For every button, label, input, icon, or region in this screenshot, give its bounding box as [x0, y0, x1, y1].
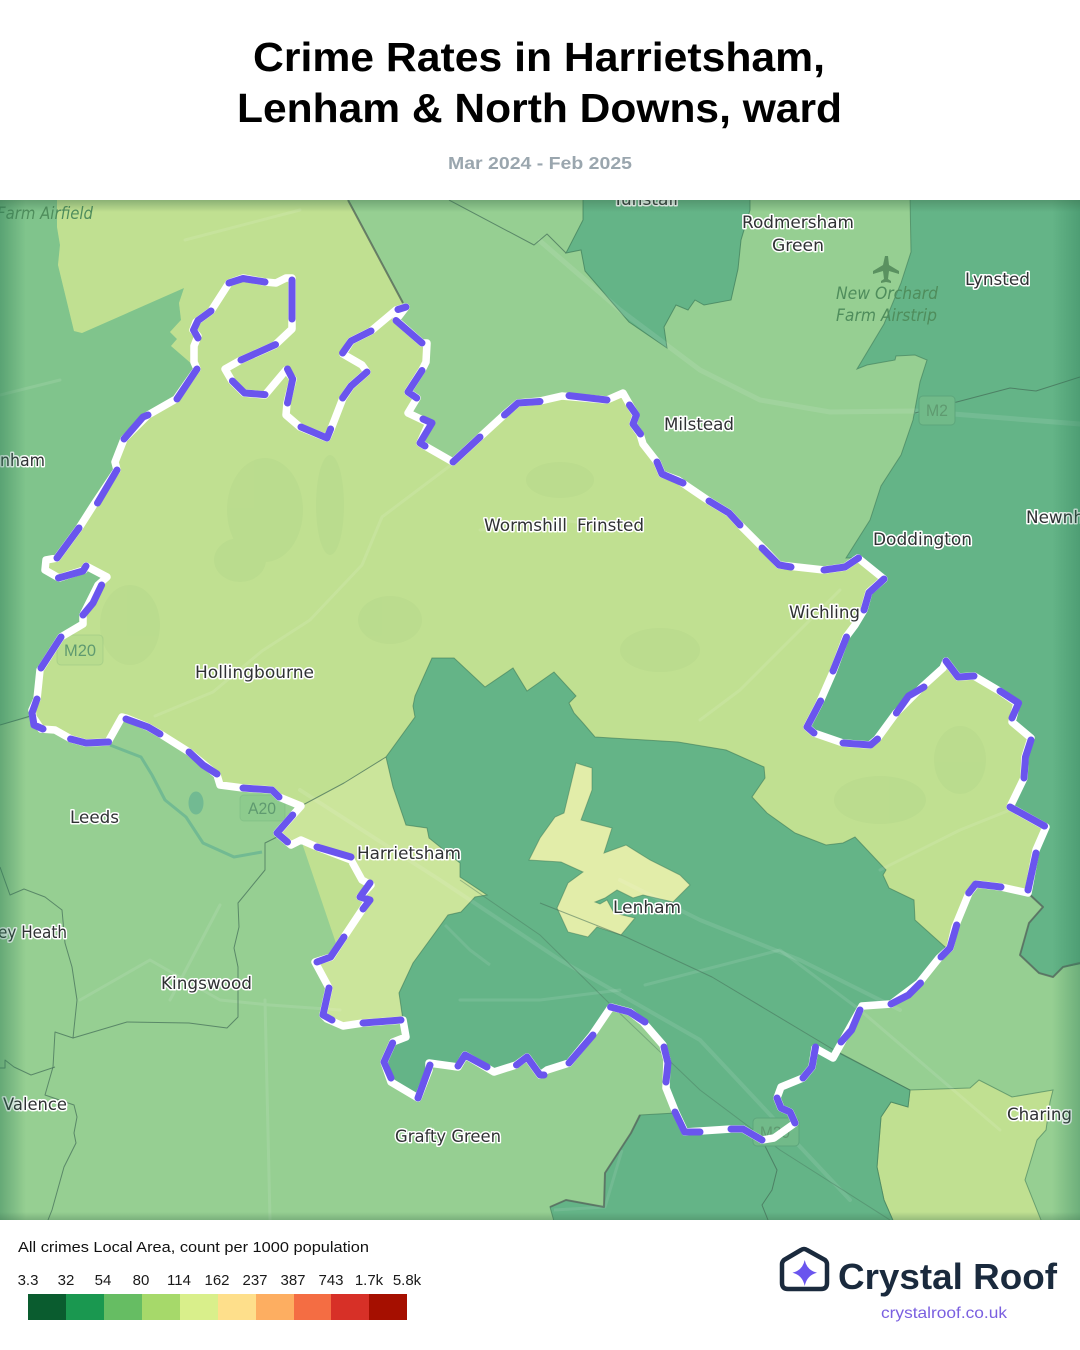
legend values [18, 1272, 422, 1289]
place labels [0, 190, 1080, 1146]
airfield labels: New Orchard [836, 284, 938, 303]
ward boundary purple dashes [32, 278, 1044, 1140]
icon: airplane [873, 256, 899, 283]
date range subtitle: Mar 2024 - Feb 2025 [448, 153, 632, 173]
place labels: Lynsted [965, 270, 1030, 289]
map [0, 190, 1080, 1225]
road shields: M20 [64, 641, 96, 660]
region: west mid green [0, 200, 197, 725]
website: crystalroof.co.uk [881, 1305, 1008, 1322]
legend values: 1.7k [355, 1272, 384, 1289]
legend values: 162 [204, 1272, 230, 1289]
legend values: 743 [318, 1272, 344, 1289]
place labels: Grafty Green [395, 1127, 501, 1146]
road shields [57, 396, 955, 1146]
icon: house with star [782, 1249, 827, 1289]
legend values: 237 [242, 1272, 268, 1289]
place labels: Valence [3, 1095, 67, 1114]
place labels: nham [0, 451, 45, 470]
place labels: Lenham [613, 898, 681, 917]
river [110, 745, 622, 1210]
airfield labels: Farm Airstrip [836, 306, 937, 325]
legend values: 3.3 [18, 1272, 38, 1289]
place labels: Charing [1007, 1105, 1072, 1124]
region: Harrietsham yellow green [277, 757, 487, 1026]
road shields: A20 [248, 799, 276, 818]
place labels: ey Heath [0, 923, 67, 942]
title: Lenham & North Downs, ward [237, 85, 842, 131]
legend values: 5.8k [393, 1272, 422, 1289]
legend values: 54 [95, 1272, 111, 1289]
place labels: Rodmersham [742, 213, 854, 232]
place labels: Doddington [873, 530, 972, 549]
legend values: 32 [58, 1272, 74, 1289]
road shields: M20 [760, 1123, 790, 1142]
place labels: Hollingbourne [195, 663, 314, 682]
ward boundary white line [32, 278, 1046, 1140]
region: Lenham pale yellow [529, 763, 690, 937]
airfield labels [0, 204, 938, 325]
place labels: Milstead [664, 415, 734, 434]
logo wordmark: Crystal Roof [838, 1256, 1058, 1297]
airfield labels: Farm Airfield [0, 204, 93, 223]
place labels: Wichling [789, 603, 860, 622]
title [237, 34, 842, 131]
legend values: 114 [167, 1272, 191, 1289]
boundary lines [0, 200, 1080, 1220]
road shields: M2 [926, 401, 948, 420]
title: Crime Rates in Harrietsham, [253, 34, 825, 80]
legend colour scale [28, 1294, 407, 1320]
place labels: Green [772, 236, 824, 255]
region: Tunstall dark green [566, 195, 750, 348]
region: ward yellow green [36, 379, 1042, 946]
place labels: Kingswood [161, 974, 252, 993]
map edge vignette [0, 200, 1080, 1220]
legend [18, 1239, 422, 1320]
place labels: Harrietsham [357, 844, 461, 863]
forest patches [100, 455, 986, 824]
place labels: Tunstall [612, 190, 678, 209]
place labels: Wormshill [484, 516, 567, 535]
region: Charing yellow green [877, 1080, 1053, 1225]
region: central dark green [384, 658, 945, 1225]
legend values: 80 [133, 1272, 149, 1289]
region: east dark green [807, 195, 1080, 977]
place labels: Leeds [70, 808, 119, 827]
logo: Crystal Roof [782, 1249, 1058, 1322]
legend title: All crimes Local Area, count per 1000 population [18, 1239, 369, 1256]
place labels: Frinsted [577, 516, 644, 535]
roads [0, 210, 1080, 1220]
legend values: 387 [280, 1272, 306, 1289]
region: north-west yellow green [57, 200, 403, 433]
